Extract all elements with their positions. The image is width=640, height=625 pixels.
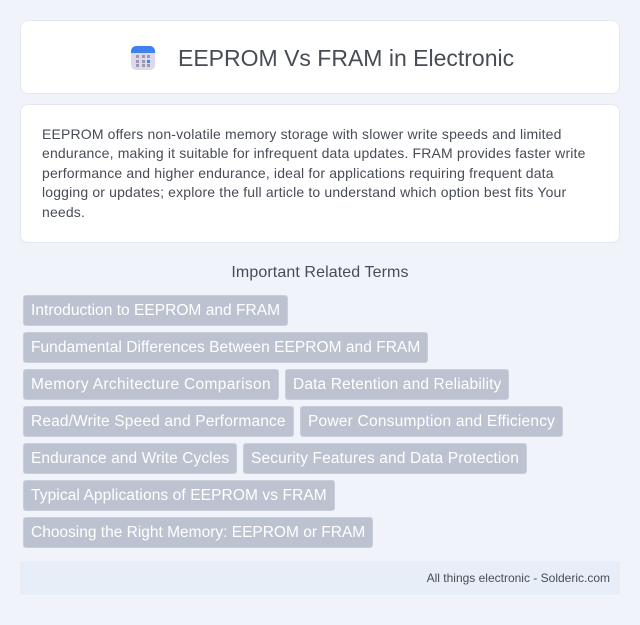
intro text: performance and higher endurance, ideal for applications requiring frequent data <box>42 165 554 181</box>
tag: Memory Architecture Comparison <box>31 376 271 393</box>
tag <box>23 480 335 511</box>
tag: Typical Applications of EEPROM vs FRAM <box>31 487 327 504</box>
intro panel <box>20 104 620 243</box>
intro text: logging or updates; explore the full article to understand which option best fits Your <box>42 184 566 200</box>
tag <box>23 406 294 437</box>
tag <box>23 332 428 363</box>
tag <box>285 369 509 400</box>
intro text: EEPROM offers non-volatile memory storage with slower write speeds and limited <box>42 126 562 142</box>
section heading: Important Related Terms <box>231 264 409 281</box>
tag: Fundamental Differences Between EEPROM and FRAM <box>31 339 420 356</box>
tag <box>23 369 279 400</box>
tag: Security Features and Data Protection <box>251 450 519 467</box>
tag: Choosing the Right Memory: EEPROM or FRAM <box>31 524 365 541</box>
tag <box>23 517 373 548</box>
header panel <box>20 20 620 94</box>
title: EEPROM Vs FRAM in Electronic <box>178 45 514 71</box>
tag: Introduction to EEPROM and FRAM <box>31 302 280 319</box>
intro text: needs. <box>42 204 85 220</box>
intro text <box>42 126 586 220</box>
tag: Data Retention and Reliability <box>293 376 501 393</box>
footer: All things electronic - Solderic.com <box>427 571 610 585</box>
footer <box>20 561 620 595</box>
tag <box>243 443 527 474</box>
tag list <box>23 295 563 548</box>
icon: calendar <box>131 46 155 70</box>
tag: Endurance and Write Cycles <box>31 450 229 467</box>
tag: Power Consumption and Efficiency <box>308 413 555 430</box>
tag <box>300 406 563 437</box>
intro text: endurance, making it suitable for infrequent data updates. FRAM provides faster write <box>42 145 586 161</box>
tag <box>23 295 288 326</box>
tag: Read/Write Speed and Performance <box>31 413 286 430</box>
tag <box>23 443 237 474</box>
